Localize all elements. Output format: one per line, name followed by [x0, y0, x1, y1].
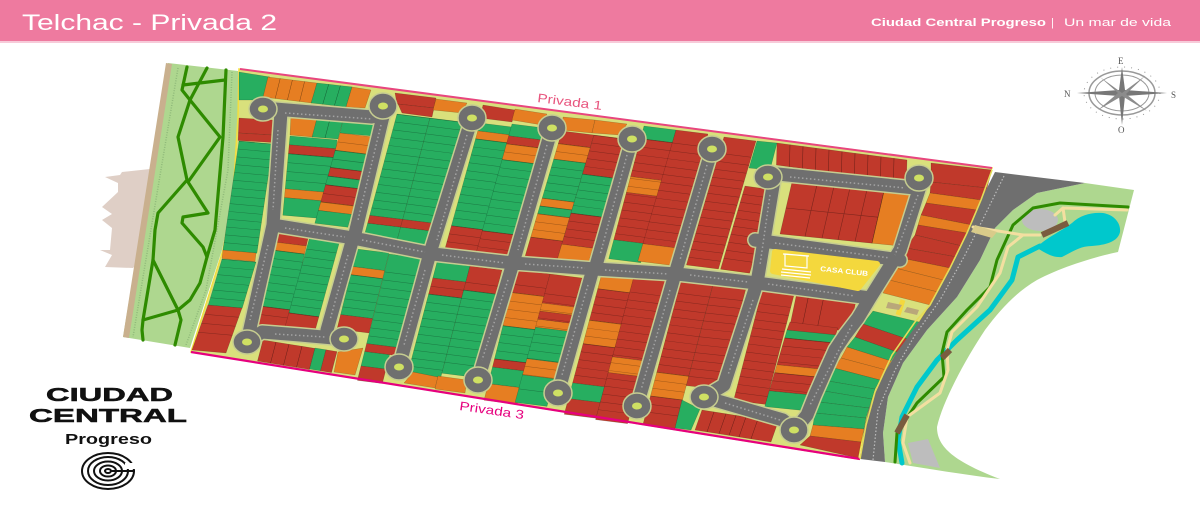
logo: Ciudad Central Progreso — [29, 385, 187, 489]
lots: upper block 6 — [686, 137, 774, 273]
lots: upper block 7 — [780, 182, 912, 246]
casa club label: CASA CLUB — [820, 266, 868, 278]
logo wordmark line 1: CIUDAD — [46, 385, 173, 405]
compass letters: N — [1064, 89, 1071, 99]
lots: upper block 3 — [445, 123, 544, 258]
header bar — [0, 0, 1200, 43]
gray plaza — [1022, 209, 1058, 231]
lots: lower block 2 — [337, 249, 421, 384]
perimeter road — [860, 170, 1085, 462]
compass letters: O — [1118, 125, 1125, 135]
river — [898, 246, 1040, 463]
lots: lower block 4 — [484, 270, 582, 406]
casa club — [773, 252, 877, 288]
compass letters — [1064, 56, 1176, 135]
lots: lower block 5 — [564, 273, 666, 424]
label: Privada 1: Privada 1 — [537, 91, 603, 113]
lots: upper block 1 — [283, 115, 377, 227]
compass letters: S — [1171, 90, 1176, 100]
lake — [1037, 213, 1120, 257]
site base — [191, 69, 992, 459]
green trail — [895, 203, 1128, 462]
entrance — [886, 300, 919, 315]
compass letters: E — [1118, 56, 1124, 66]
lots: lower block 3 — [404, 262, 502, 393]
boundary lines — [191, 69, 992, 459]
cul-de-sac circles — [233, 93, 933, 443]
lots: southeast column — [800, 311, 919, 458]
logo wordmark line 2: CENTRAL — [29, 405, 187, 426]
compass rose — [1064, 56, 1176, 135]
lots: lower block 7 — [734, 287, 856, 412]
lots: lower block 1 — [255, 230, 363, 375]
street network — [247, 108, 922, 430]
road crossing — [971, 225, 997, 238]
label: Privada 3: Privada 3 — [459, 399, 525, 422]
lots: lower block 6 — [643, 277, 778, 442]
west park — [123, 63, 238, 348]
title: Telchac - Privada 2 — [22, 10, 277, 35]
logo subtitle: Progreso — [65, 431, 152, 448]
lots: north strip — [239, 72, 907, 182]
brand tagline: Ciudad Central Progreso — [871, 17, 1046, 29]
icon: club house — [781, 254, 811, 278]
slogan: Un mar de vida — [1064, 17, 1172, 29]
lots: upper block 5 — [609, 126, 708, 265]
east waterway and trails — [895, 203, 1128, 468]
lots: west column — [192, 118, 273, 353]
beach dune silhouette — [100, 169, 150, 268]
logo emblem — [82, 453, 136, 489]
brown bridges — [897, 223, 1068, 433]
tagline divider: | — [1051, 17, 1054, 29]
east green area — [883, 183, 1134, 479]
lots: east column — [883, 163, 992, 305]
gray parking — [908, 439, 940, 468]
park trails — [142, 67, 226, 345]
lots: upper block 4 — [525, 131, 625, 264]
beige walkway — [903, 208, 1127, 463]
lots: upper block 2 — [363, 114, 462, 247]
